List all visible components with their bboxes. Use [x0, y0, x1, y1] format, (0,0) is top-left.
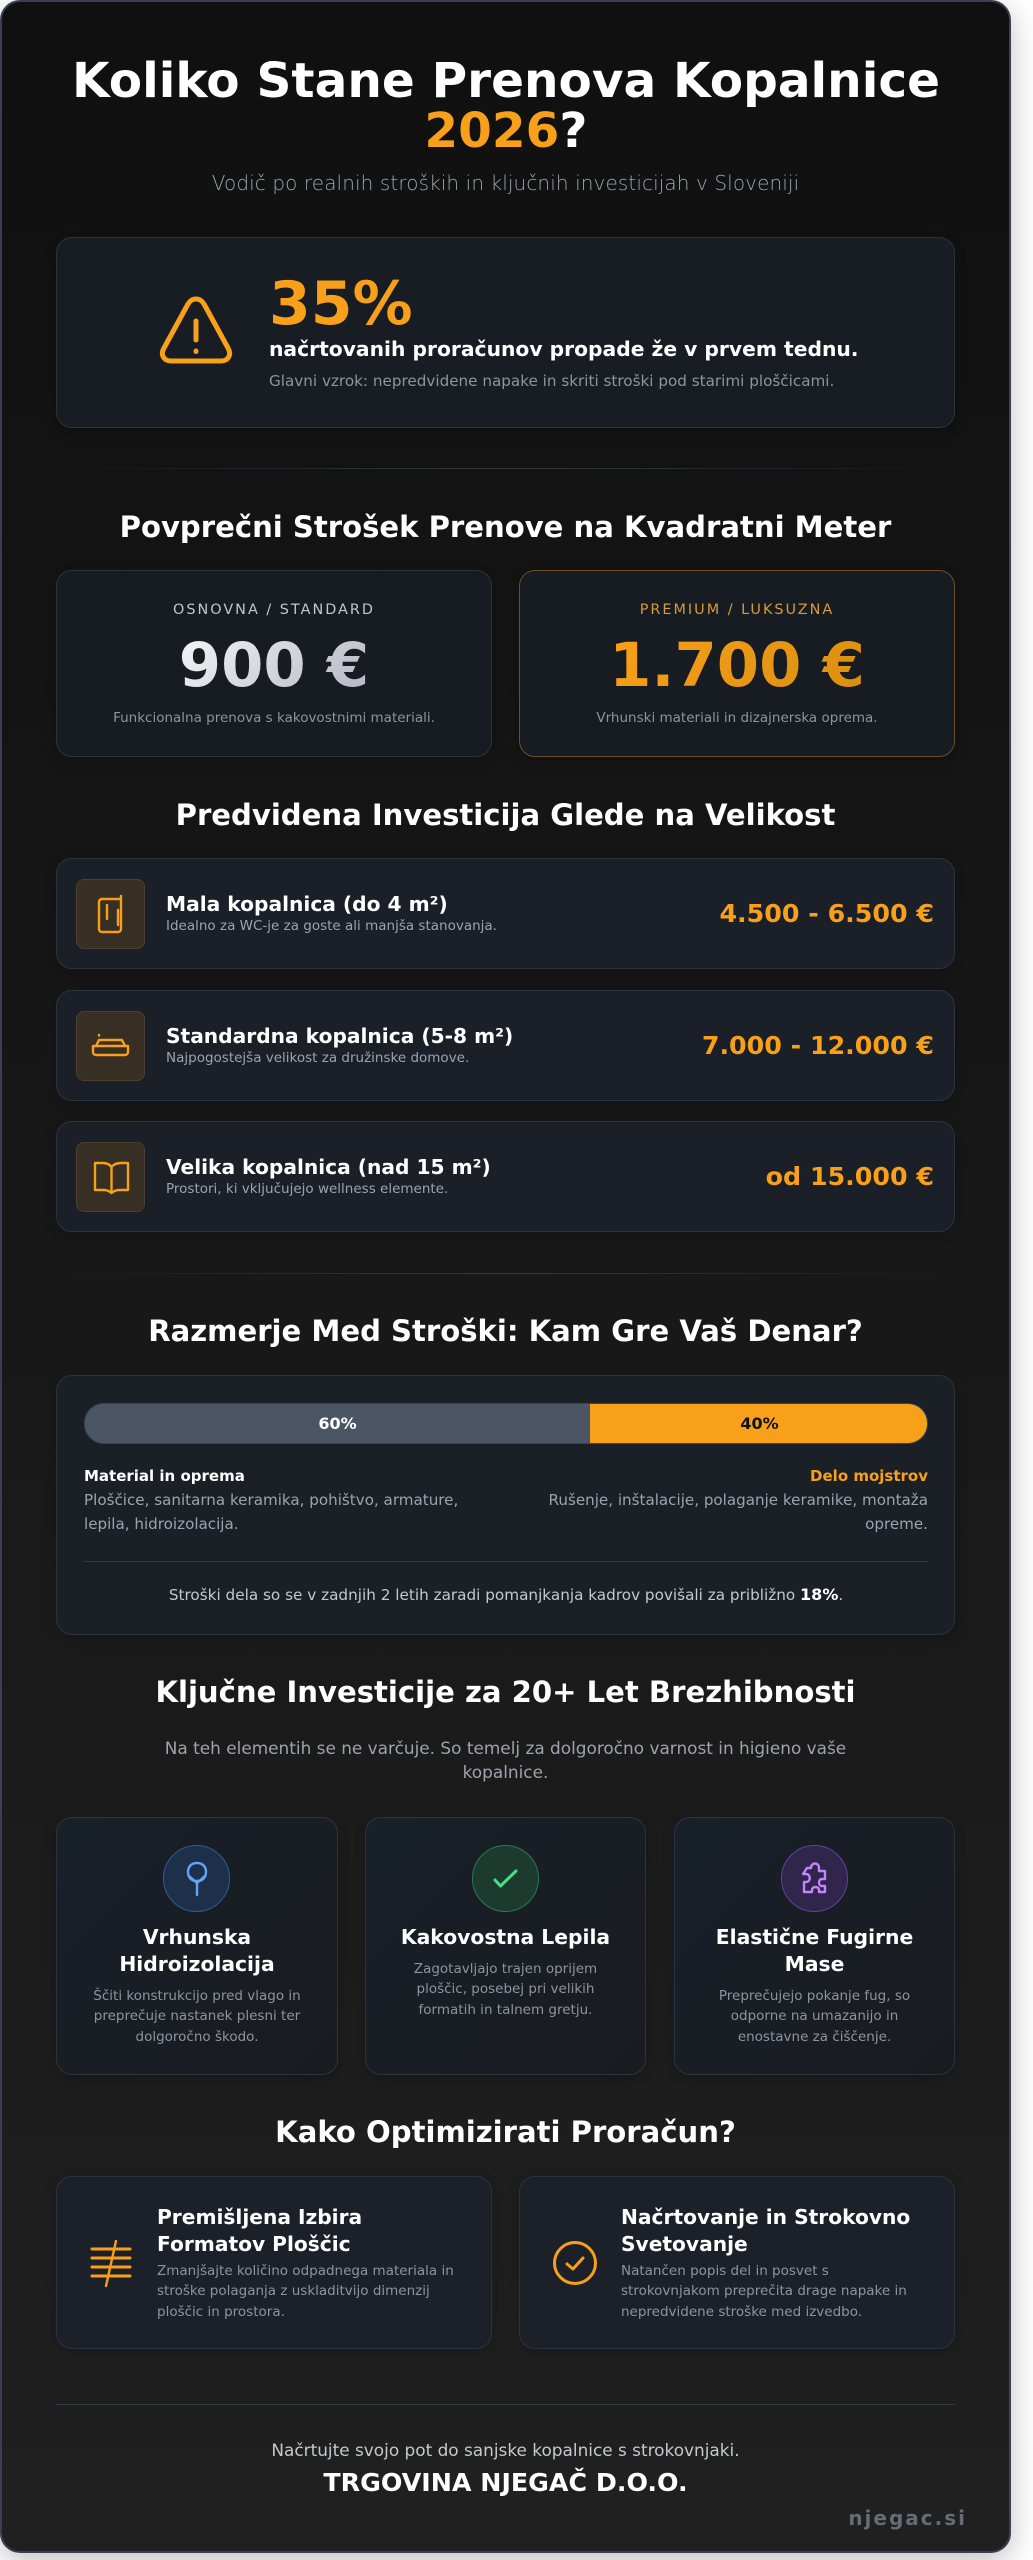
note: Stroški dela so se v zadnjih 2 letih zaradi pomanjkanja kadrov povišali za približno 18%.: [169, 1585, 843, 1604]
row description: Idealno za WC-je za goste ali manjša stanovanja.: [166, 918, 497, 934]
legend: labour: opreme.: [865, 1514, 928, 1532]
panel: premium price: [519, 570, 955, 757]
card title: Mase: [785, 1952, 844, 1976]
title: [72, 53, 940, 159]
icon: check circle: [553, 2241, 597, 2285]
intro text: Na teh elementih se ne varčuje. So temelj za dolgoročno varnost in higieno vaše: [165, 1738, 846, 1758]
label: OSNOVNA / STANDARD: [173, 602, 375, 618]
heading: key investments: Ključne Investicije za 20+ Let Brezhibnosti: [155, 1675, 856, 1709]
tip title: Premišljena Izbira: [157, 2205, 362, 2229]
panel: adhesives: [365, 1817, 646, 2075]
tip title: [157, 2205, 362, 2256]
card title: Vrhunska: [143, 1925, 251, 1949]
bar segment: material 60%: 60%: [318, 1414, 357, 1433]
row title: Mala kopalnica (do 4 m²): [166, 892, 448, 916]
intro text: kopalnice.: [463, 1762, 548, 1782]
label: PREMIUM / LUKSUZNA: [640, 602, 834, 618]
card text: formatih in talnem gretju.: [419, 2002, 592, 2018]
tip text: stroške polaganja z uskladitvijo dimenzij: [157, 2283, 430, 2299]
icon: green circle: [472, 1845, 539, 1912]
card title: [119, 1925, 275, 1976]
stacked bar: [84, 1403, 928, 1444]
heading: cost ratio: Razmerje Med Stroški: Kam Gre Vaš Denar?: [148, 1314, 863, 1348]
card text: preprečuje nastanek plesni ter: [94, 2008, 300, 2024]
card text: dolgoročno škodo.: [136, 2029, 258, 2045]
description: Funkcionalna prenova s kakovostnimi materiali.: [113, 710, 435, 726]
legend: labour: Delo mojstrov: [810, 1466, 928, 1484]
icon: bathtub: [76, 1011, 145, 1081]
row title: Velika kopalnica (nad 15 m²): [166, 1155, 491, 1179]
tip title: [621, 2205, 910, 2256]
legend: material: Material in oprema: [84, 1466, 245, 1484]
icon: small bathroom: [76, 879, 145, 949]
tip title: Načrtovanje in Strokovno: [621, 2205, 910, 2229]
card text: Preprečujejo pokanje fug, so: [719, 1988, 910, 2004]
panel: standard price: [56, 570, 492, 757]
card text: ploščic, posebej pri velikih: [417, 1981, 594, 1997]
row price: od 15.000 €: [766, 1162, 934, 1191]
stat text: načrtovanih proračunov propade že v prvem tednu.: [269, 337, 859, 361]
legend: material: Ploščice, sanitarna keramika, pohištvo, armature,: [84, 1490, 458, 1508]
row title: Standardna kopalnica (5-8 m²): [166, 1024, 513, 1048]
tip title: Formatov Ploščic: [157, 2232, 351, 2256]
footer tagline: Načrtujte svojo pot do sanjske kopalnice s strokovnjaki.: [271, 2440, 740, 2460]
card title: Elastične Fugirne: [716, 1925, 913, 1949]
stat number: 35%: [269, 268, 413, 338]
footer website: njegac.si: [848, 2506, 967, 2530]
tip text: [157, 2263, 454, 2320]
icon: tiles: [90, 2240, 132, 2288]
icon: warning triangle: [160, 296, 232, 364]
icon: blue circle: [163, 1845, 230, 1912]
description: Vrhunski materiali in dizajnerska oprema.: [596, 710, 878, 726]
row description: Prostori, ki vključujejo wellness elemente.: [166, 1181, 448, 1197]
panel: small bathroom row: [56, 858, 955, 969]
bar segment: labour 40%: [590, 1404, 929, 1443]
bar segment: labour 40%: 40%: [740, 1414, 779, 1433]
price: 900 €: [179, 631, 369, 701]
intro text: [165, 1738, 846, 1782]
tip text: Natančen popis del in posvet s: [621, 2263, 829, 2279]
panel: grouts: [674, 1817, 955, 2075]
card title: [716, 1925, 913, 1976]
tip text: strokovnjakom preprečita drage napake in: [621, 2283, 907, 2299]
heading: cost per square meter: Povprečni Strošek Prenove na Kvadratni Meter: [120, 510, 891, 544]
card text: [719, 1988, 910, 2045]
panel: cost split: [56, 1375, 955, 1635]
tip text: ploščic in prostora.: [157, 2304, 285, 2320]
card text: Zagotavljajo trajen oprijem: [414, 1961, 597, 1977]
card text: [93, 1988, 301, 2045]
legend: material: [84, 1466, 458, 1532]
heading: investment by size: Predvidena Investicija Glede na Velikost: [176, 798, 835, 832]
tip text: nepredvidene stroške med izvedbo.: [621, 2304, 862, 2320]
icon: purple circle: [781, 1845, 848, 1912]
legend: material: lepila, hidroizolacija.: [84, 1514, 239, 1532]
row price: 4.500 - 6.500 €: [719, 899, 934, 928]
tip text: [621, 2263, 907, 2320]
panel: tile formats: [56, 2176, 492, 2349]
stat note: Glavni vzrok: nepredvidene napake in skriti stroški pod starimi ploščicami.: [269, 372, 834, 390]
panel: hero statistic: [56, 237, 955, 428]
bar segment: material 60%: [85, 1404, 590, 1443]
card text: [414, 1961, 597, 2018]
panel: large bathroom row: [56, 1121, 955, 1232]
card text: odporne na umazanijo in: [731, 2008, 898, 2024]
footer company: TRGOVINA NJEGAČ D.O.O.: [323, 2468, 688, 2497]
heading: optimize budget: Kako Optimizirati Proračun?: [275, 2115, 736, 2149]
panel: waterproofing: [56, 1817, 338, 2075]
panel: planning and advice: [519, 2176, 955, 2349]
tip title: Svetovanje: [621, 2232, 748, 2256]
panel: standard bathroom row: [56, 990, 955, 1101]
subtitle: Vodič po realnih stroških in ključnih investicijah v Sloveniji: [212, 171, 799, 195]
row description: Najpogostejša velikost za družinske domove.: [166, 1050, 469, 1066]
legend: labour: [549, 1466, 928, 1532]
card text: enostavne za čiščenje.: [738, 2029, 891, 2045]
card text: Ščiti konstrukcijo pred vlago in: [93, 1988, 301, 2004]
tip text: Zmanjšajte količino odpadnega materiala in: [157, 2263, 454, 2279]
row price: 7.000 - 12.000 €: [702, 1031, 934, 1060]
title: Koliko Stane Prenova Kopalnice: [72, 53, 940, 109]
card title: Hidroizolacija: [119, 1952, 275, 1976]
legend: labour: Rušenje, inštalacije, polaganje keramike, montaža: [549, 1490, 928, 1508]
icon: open book: [76, 1142, 145, 1212]
title: 2026?: [424, 103, 588, 159]
price: 1.700 €: [609, 631, 865, 701]
card title: Kakovostna Lepila: [401, 1925, 610, 1949]
